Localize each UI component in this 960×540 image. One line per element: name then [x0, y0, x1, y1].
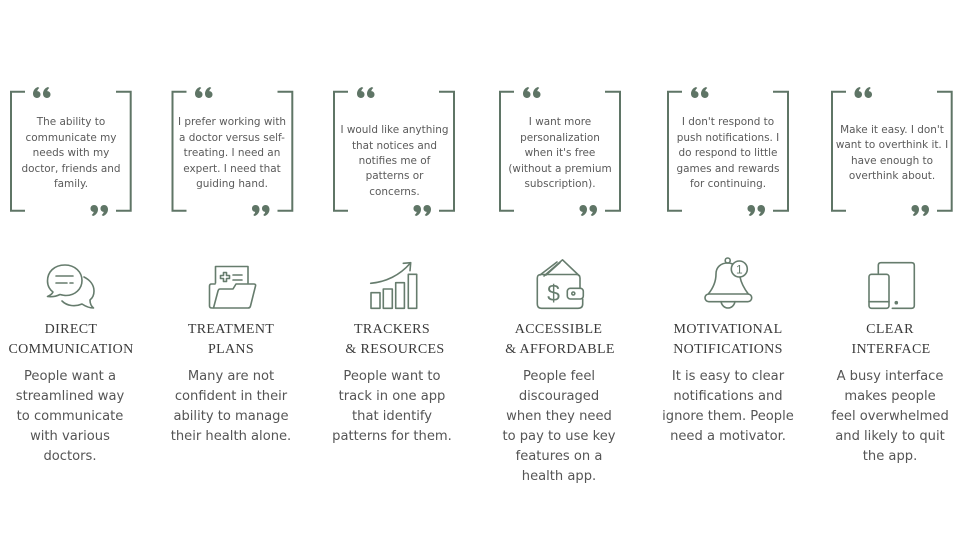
panel: quote 5: do respond to little — [679, 147, 777, 159]
text: direct communication body — [16, 369, 124, 464]
heading: motivational notifications: MOTIVATIONAL — [674, 322, 782, 337]
heading: direct communication: DIRECT — [45, 322, 97, 337]
panel: quote 3: I would like anything — [340, 124, 449, 136]
heading: treatment plans: PLANS — [208, 342, 254, 357]
text: treatment plans body: Many are not — [188, 369, 274, 384]
heading: accessible and affordable — [505, 322, 615, 357]
panel: quote 3: concerns. — [369, 186, 420, 198]
heading: motivational notifications — [673, 322, 783, 357]
text: direct communication body: to communicate — [17, 409, 123, 424]
icon: notification bell — [705, 258, 752, 308]
text: trackers body: People want to — [343, 369, 441, 384]
text: treatment plans body — [171, 369, 291, 444]
icon: phone and tablet — [869, 263, 914, 308]
text: treatment plans body: their health alone. — [171, 429, 291, 444]
panel: quote 2: treating. I need an — [184, 147, 280, 159]
text: direct communication body: streamlined way — [16, 389, 124, 404]
heading: clear interface — [851, 322, 931, 357]
text: trackers body — [332, 369, 452, 444]
panel: quote 6: have enough to — [851, 155, 933, 167]
text: accessible body: when they need — [506, 409, 612, 424]
panel: quote 2: a doctor versus self- — [179, 132, 285, 144]
panel: quote 5: games and rewards — [677, 163, 779, 175]
text: interface body — [831, 369, 949, 464]
heading: clear interface: CLEAR — [866, 322, 914, 337]
text: interface body: makes people — [844, 389, 936, 404]
heading: trackers and resources: TRACKERS — [354, 322, 430, 337]
text: accessible body — [502, 369, 616, 484]
panel: quote 3: that notices and — [352, 140, 437, 152]
text: accessible body: features on a — [516, 449, 602, 464]
panel: quote 5: I don't respond to — [682, 116, 774, 128]
text: notifications body: It is easy to clear — [672, 369, 785, 384]
panel: quote 1: communicate my — [26, 132, 116, 144]
heading: treatment plans — [188, 322, 274, 357]
panel: quote 6: want to overthink it. I — [836, 139, 948, 151]
icon: growth chart — [371, 263, 417, 308]
panel: quote 3 — [334, 87, 454, 216]
panel: quote 5: push notifications. I — [677, 132, 779, 144]
icon: chat bubbles — [48, 265, 94, 308]
text: trackers body: track in one app — [339, 389, 445, 404]
heading: accessible and affordable: & AFFORDABLE — [505, 342, 615, 357]
panel: quote 4 — [500, 87, 620, 216]
text: accessible body: health app. — [522, 469, 596, 484]
icon: medical folder — [210, 266, 256, 308]
heading: accessible and affordable: ACCESSIBLE — [515, 322, 602, 337]
text: trackers body: patterns for them. — [332, 429, 452, 444]
text: interface body: A busy interface — [837, 369, 943, 384]
heading: clear interface: INTERFACE — [851, 342, 931, 357]
panel: quote 4: I want more — [529, 116, 591, 128]
panel: quote 4: when it's free — [525, 147, 595, 159]
icon: wallet: $ — [547, 280, 560, 306]
text: notifications body: notifications and — [673, 389, 783, 404]
icon: notification bell: 1 — [736, 262, 743, 276]
text: direct communication body: with various — [30, 429, 110, 444]
panel: quote 4: subscription). — [524, 178, 596, 190]
panel: quote 3: patterns or — [366, 170, 424, 182]
panel: quote 5 — [668, 87, 788, 216]
heading: trackers and resources — [345, 322, 445, 357]
panel: quote 6: overthink about. — [849, 170, 935, 182]
panel: quote 1: The ability to — [36, 116, 105, 128]
panel: quote 1: needs with my — [33, 147, 109, 159]
heading: direct communication — [8, 322, 134, 357]
text: notifications body — [662, 369, 794, 444]
heading: treatment plans: TREATMENT — [188, 322, 274, 337]
panel: quote 2: guiding hand. — [196, 178, 268, 190]
heading: direct communication: COMMUNICATION — [8, 342, 134, 357]
panel: quote 4: personalization — [520, 132, 600, 144]
text: interface body: feel overwhelmed — [831, 409, 949, 424]
panel: quote 6: Make it easy. I don't — [840, 124, 944, 136]
panel: quote 2: expert. I need that — [183, 163, 281, 175]
panel: quote 4: (without a premium — [508, 163, 612, 175]
text: direct communication body: People want a — [24, 369, 116, 384]
text: accessible body: People feel — [523, 369, 595, 384]
panel: quote 2: I prefer working with — [178, 116, 286, 128]
panel: quote 5: for continuing. — [690, 178, 766, 190]
heading: motivational notifications: NOTIFICATIONS — [673, 342, 783, 357]
text: accessible body: discouraged — [519, 389, 599, 404]
panel: quote 1: family. — [54, 178, 88, 190]
text: accessible body: to pay to use key — [502, 429, 616, 444]
text: treatment plans body: ability to manage — [173, 409, 289, 424]
heading: trackers and resources: & RESOURCES — [345, 342, 445, 357]
icon: wallet — [537, 260, 583, 308]
text: interface body: the app. — [863, 449, 917, 464]
text: treatment plans body: confident in their — [175, 389, 288, 404]
panel: quote 1 — [11, 87, 131, 216]
text: notifications body: need a motivator. — [670, 429, 786, 444]
text: interface body: and likely to quit — [835, 429, 945, 444]
text: notifications body: ignore them. People — [662, 409, 794, 424]
panel: quote 1: doctor, friends and — [21, 163, 121, 175]
panel: quote 2 — [172, 87, 292, 216]
text: trackers body: that identify — [352, 409, 432, 424]
text: direct communication body: doctors. — [43, 449, 97, 464]
panel: quote 3: notifies me of — [359, 155, 431, 167]
panel: quote 6 — [832, 87, 952, 216]
